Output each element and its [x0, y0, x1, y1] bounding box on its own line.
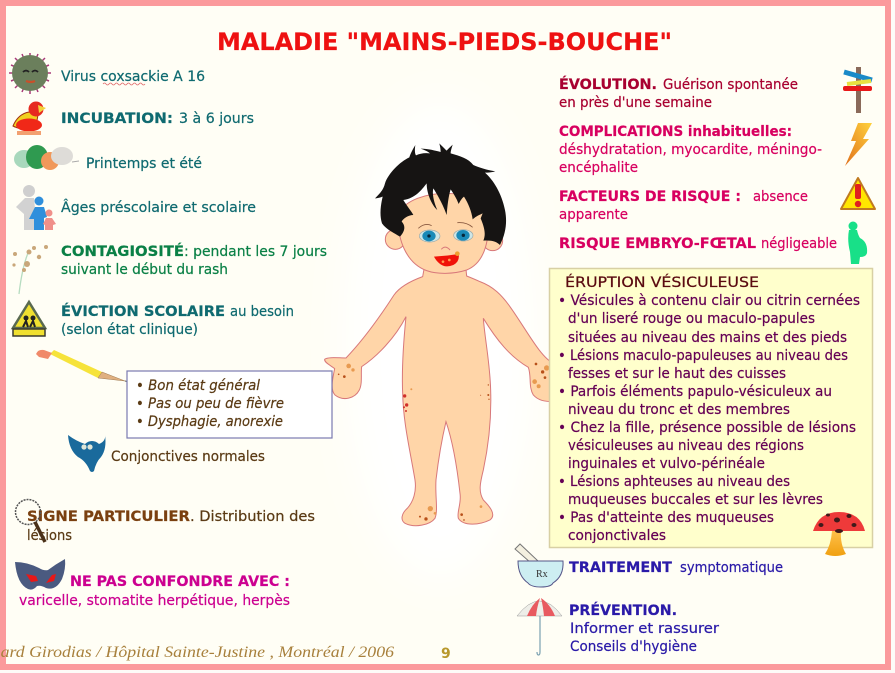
panel: right column facts — [559, 67, 875, 264]
icon: signpost — [843, 67, 872, 113]
text: evolution: en près d'une semaine — [559, 95, 712, 111]
icon: mortar and pestle: Rx — [536, 569, 548, 580]
bullet list: fesses et sur le haut des cuisses — [568, 366, 786, 382]
text box: general state: • Pas ou peu de fièvre — [136, 396, 284, 412]
title: MALADIE "MAINS-PIEDS-BOUCHE" — [217, 28, 672, 56]
illustration: child with rash — [325, 143, 553, 526]
panel: left column facts — [9, 53, 327, 338]
text: complications: COMPLICATIONS inhabituelles: — [559, 124, 792, 140]
icon: school warning sign — [13, 302, 45, 336]
text: complications — [559, 124, 822, 176]
text: incubation — [61, 111, 254, 127]
icon: mushroom — [813, 512, 865, 556]
text: contagiosite: CONTAGIOSITÉ — [61, 243, 184, 260]
icon: magnifying glass — [16, 500, 45, 542]
bullet list: • Vésicules à contenu clair ou citrin cernées — [558, 293, 860, 309]
text: eviction: (selon état clinique) — [61, 322, 198, 338]
text: contagiosite: suivant le début du rash — [61, 262, 228, 278]
text: conjunctivae: Conjonctives normales — [111, 449, 265, 465]
icon: family silhouettes — [16, 185, 56, 230]
icon: warning triangle — [841, 178, 875, 209]
text box: general state: • Bon état général — [136, 378, 260, 394]
mouth with lesions — [434, 254, 459, 266]
icon: mortar and pestle — [515, 544, 563, 587]
text: differential diagnosis: varicelle, stomatite herpétique, herpès — [19, 593, 290, 609]
text: complications: encéphalite — [559, 160, 638, 176]
bullet list: inguinales et vulvo-périnéale — [568, 456, 765, 472]
text: contagiosite: : pendant les 7 jours — [184, 244, 327, 260]
bullet list: muqueuses buccales et sur les lèvres — [568, 492, 823, 508]
text: prevention: Conseils d'hygiène — [570, 639, 697, 655]
text: particular sign with magnifier — [16, 500, 315, 544]
text: treatment: TRAITEMENT — [569, 560, 672, 576]
icon: pencil — [36, 350, 135, 383]
bullet list — [558, 293, 860, 544]
bullet list: • Parfois éléments papulo-vésiculeux au — [558, 384, 832, 400]
bullet list: • Pas d'atteinte des muqueuses — [558, 510, 774, 526]
text: evolution — [559, 76, 798, 111]
icon: duck — [13, 102, 46, 135]
bullet list: • Lésions maculo-papuleuses au niveau des — [558, 348, 848, 364]
bullet list: d'un liseré rouge ou maculo-papules — [568, 311, 815, 327]
ears — [385, 229, 405, 249]
text: embryo-fetal risk: RISQUE EMBRYO-FŒTAL — [559, 236, 756, 252]
bullet list: • Chez la fille, présence possible de lésions — [558, 420, 856, 436]
bullet list: conjonctivales — [568, 528, 666, 544]
icon: seasons leaves — [14, 145, 79, 170]
bullet list: • Lésions aphteuses au niveau des — [558, 474, 790, 490]
icon: owl — [68, 435, 106, 472]
text: risk factors — [559, 189, 808, 223]
bullet list: situées au niveau des mains et des pieds — [568, 330, 847, 346]
text: risk factors: apparente — [559, 207, 628, 223]
text: embryo-fetal risk: négligeable — [761, 236, 837, 252]
text: treatment — [569, 560, 783, 576]
text box: general state: • Dysphagie, anorexie — [136, 414, 283, 430]
icon: pregnant woman — [848, 222, 867, 264]
text: ages: Âges préscolaire et scolaire — [61, 198, 256, 216]
text: incubation: INCUBATION: — [61, 111, 173, 127]
text: risk factors: FACTEURS DE RISQUE : — [559, 189, 741, 205]
text: eviction: ÉVICTION SCOLAIRE — [61, 303, 225, 320]
text: particular sign with magnifier: SIGNE PARTICULIER — [27, 509, 190, 525]
bullet list: vésiculeuses au niveau des régions — [568, 438, 804, 454]
text: risk factors: absence — [753, 189, 808, 205]
body — [325, 269, 553, 526]
face — [398, 193, 489, 273]
hair — [375, 143, 506, 245]
text: differential diagnosis — [19, 574, 290, 609]
text: prevention: PRÉVENTION. — [569, 602, 677, 619]
text: contagiosite — [61, 243, 327, 278]
text: incubation: 3 à 6 jours — [179, 111, 254, 127]
eyes — [419, 230, 440, 242]
page number: 9 — [441, 646, 451, 662]
text: eviction: au besoin — [230, 304, 294, 320]
icon: umbrella — [517, 598, 562, 655]
icon: lightning — [845, 123, 872, 166]
text: particular sign with magnifier: . Distribution des — [190, 509, 315, 525]
text box: general state — [127, 371, 332, 438]
text: virus: Virus coxsackie A 16 — [61, 69, 205, 85]
rash spots — [346, 364, 549, 515]
panel: vesicular eruption — [550, 268, 872, 548]
panel: general state box with pencil — [36, 350, 332, 438]
text: eviction — [61, 303, 294, 338]
text: differential diagnosis: NE PAS CONFONDRE AVEC : — [70, 574, 290, 590]
icon: virus — [9, 53, 51, 94]
text: complications: déshydratation, myocardite, méningo- — [559, 142, 822, 158]
heading: eruption: ÉRUPTION VÉSICULEUSE — [565, 274, 759, 291]
text: prevention — [569, 602, 719, 655]
text: seasons: Printemps et été — [86, 156, 202, 172]
text: treatment: symptomatique — [680, 560, 783, 576]
bullet list: niveau du tronc et des membres — [568, 402, 790, 418]
nose — [441, 247, 450, 250]
text: prevention: Informer et rassurer — [570, 621, 719, 637]
text: particular sign with magnifier: lésions — [27, 528, 72, 544]
icon: mask — [15, 559, 65, 590]
text: evolution: ÉVOLUTION. — [559, 76, 657, 93]
text: evolution: Guérison spontanée — [663, 77, 798, 93]
icon: sparkler — [12, 245, 48, 294]
